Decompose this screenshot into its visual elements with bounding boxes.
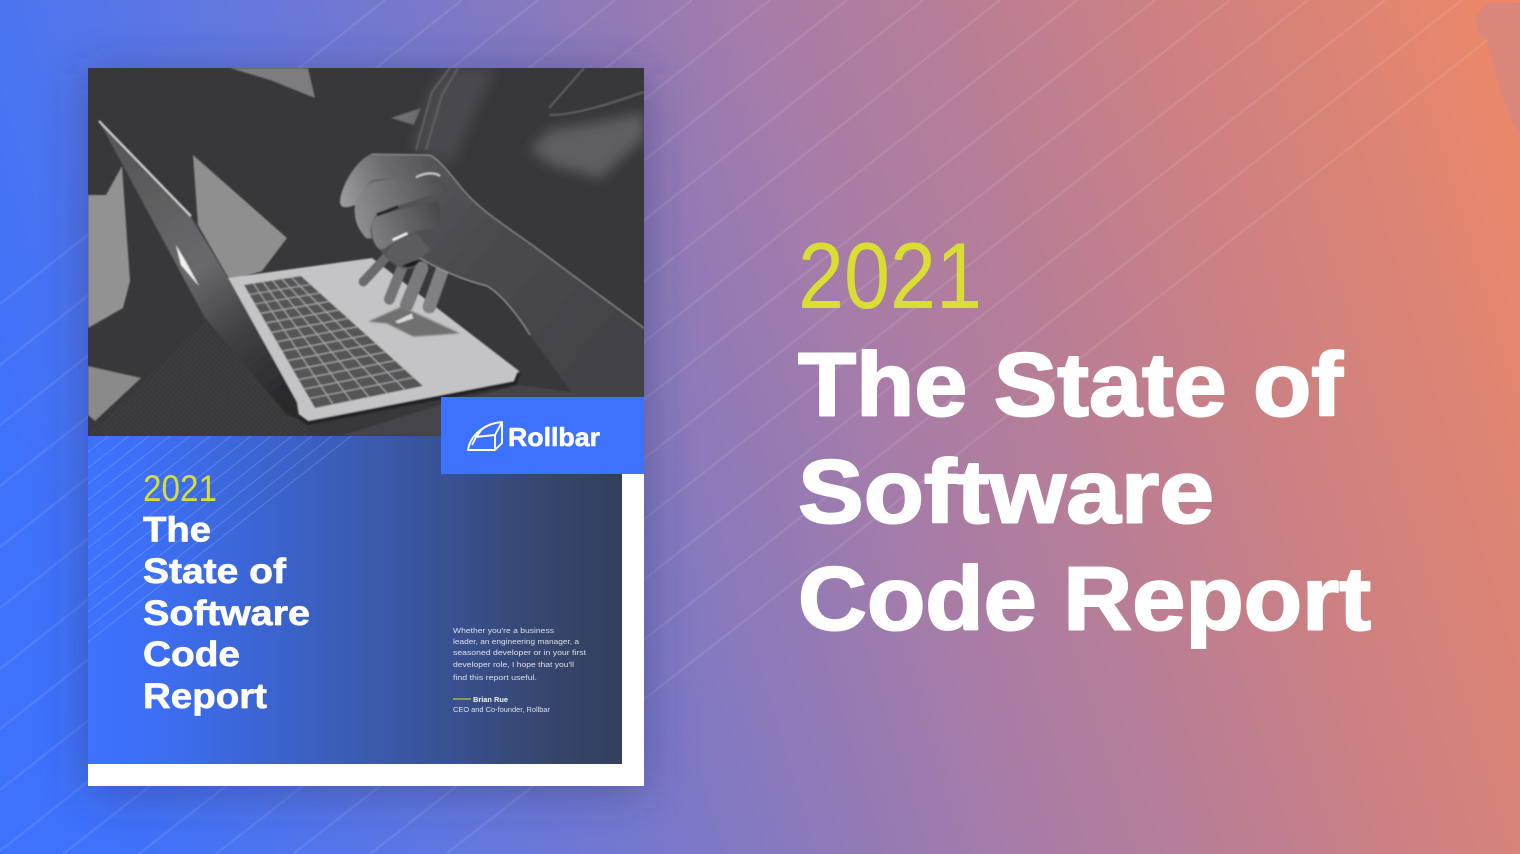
middle finger: [354, 177, 429, 240]
main heading: [798, 223, 1371, 650]
cover quote: leader, an engineering manager, a: [453, 637, 580, 646]
hand and arm: [340, 154, 644, 400]
cover title: [143, 468, 310, 716]
gradient title panel: [88, 436, 622, 764]
year: 2021: [798, 223, 982, 328]
cover photo: hands on laptop: [88, 68, 644, 436]
cover title: State of: [143, 551, 286, 591]
background artifact patch, top right: [1475, 3, 1520, 133]
laptop base: [228, 258, 519, 421]
main heading: Software: [798, 442, 1214, 542]
icon: Rollbar logo mark: [468, 422, 502, 450]
main heading: Code Report: [798, 550, 1371, 650]
cover title: The: [143, 510, 211, 550]
cover drop shadow: [88, 74, 644, 792]
cover title: 2021: [143, 468, 217, 509]
cover quote: [453, 626, 587, 714]
cover quote: developer role, I hope that you'll: [453, 660, 574, 669]
hand silhouette: [368, 164, 644, 397]
logo tab: [441, 397, 644, 474]
lower fingers: [363, 257, 387, 282]
cover quote: seasoned developer or in your first: [453, 648, 587, 657]
little finger: [387, 233, 430, 269]
cover quote: Whether you're a business: [453, 626, 554, 635]
logo wordmark: Rollbar: [508, 422, 600, 452]
keyboard: [244, 276, 423, 408]
cover quote: CEO and Co-founder, Rollbar: [453, 705, 550, 714]
cover title: Code: [143, 634, 240, 674]
cover title: Report: [143, 676, 267, 716]
main heading: The State of: [798, 336, 1344, 436]
index finger: [339, 154, 423, 208]
report cover: [88, 68, 644, 786]
laptop lid: [99, 121, 300, 420]
cover quote: find this report useful.: [453, 673, 537, 682]
cover title: Software: [143, 593, 310, 633]
cover white page: [88, 68, 644, 786]
ring finger: [371, 208, 423, 250]
shadow on trackpad: [368, 307, 460, 337]
cover quote: Brian Rue: [473, 695, 508, 704]
